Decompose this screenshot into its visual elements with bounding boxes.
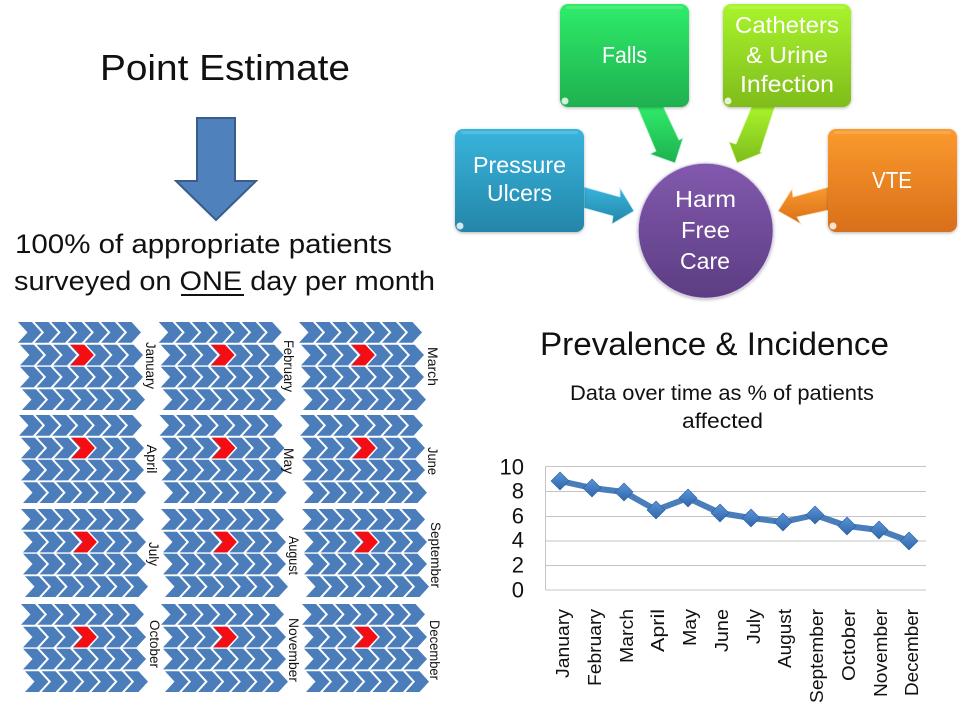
month block: November (161, 604, 301, 692)
x axis labels: March (617, 609, 637, 663)
month block: March: March (425, 347, 440, 386)
data markers (551, 472, 918, 550)
month block: January (18, 322, 158, 410)
y axis labels: 6 (512, 504, 524, 528)
y axis labels: 4 (512, 528, 524, 552)
month block: June (300, 415, 440, 503)
box: Pressure Ulcers: Ulcers (487, 180, 552, 206)
month block: January: January (143, 342, 158, 389)
line chart: percent of patients affected by month (500, 454, 926, 703)
text block: survey description: surveyed on ONE day per month (14, 266, 435, 296)
x axis labels: June (712, 609, 732, 652)
arrow: VTE to centre (778, 187, 829, 224)
box: Falls (560, 4, 689, 107)
x axis labels (553, 609, 922, 703)
arrow: down from title (176, 118, 256, 220)
month block: May (160, 415, 296, 503)
arrow: Pressure Ulcers to centre (584, 187, 634, 224)
month block: April (19, 415, 159, 503)
x axis labels: February (585, 609, 605, 686)
y axis labels: 10 (500, 454, 524, 480)
x axis labels: December (902, 609, 922, 696)
x axis labels: April (648, 609, 668, 652)
x axis labels: November (871, 609, 891, 697)
y axis labels: 0 (512, 578, 524, 602)
month block: May: May (281, 448, 296, 474)
x axis labels: October (839, 609, 859, 681)
circle: Harm Free Care: Care (680, 248, 730, 274)
x axis labels: August (775, 609, 795, 668)
box: VTE: VTE (872, 167, 912, 193)
month block: September (302, 509, 443, 597)
month block: February (159, 322, 296, 410)
x axis labels: May (680, 609, 700, 646)
chart title: Data over time as % of patients (570, 382, 874, 405)
text block: survey description (14, 229, 435, 296)
y axis labels: 2 (512, 552, 524, 578)
box: VTE (828, 129, 957, 232)
heading: Prevalence and Incidence: Prevalence & Incidence (540, 326, 889, 362)
x axis labels: July (744, 609, 764, 644)
month block: July (21, 509, 161, 597)
box: Catheters and Urine Infection: Catheters (735, 12, 839, 38)
circle: Harm Free Care (638, 163, 773, 298)
box: Catheters and Urine Infection: & Urine (746, 42, 828, 68)
box: Catheters and Urine Infection (723, 4, 851, 107)
x axis labels: September (807, 609, 827, 703)
month block: August (161, 509, 301, 597)
text block: survey description: 100% of appropriate patients (15, 229, 392, 259)
box: Falls: Falls (602, 42, 647, 68)
month block: December: December (427, 620, 442, 680)
month block: October (21, 604, 162, 692)
chart title (570, 382, 874, 433)
month block: September: September (428, 522, 443, 588)
month block: August: August (286, 536, 301, 575)
panel: Harm Free Care diagram (455, 4, 957, 298)
arrow: Catheters to centre (729, 106, 775, 163)
month block: March (299, 322, 440, 410)
box: Pressure Ulcers (455, 129, 584, 232)
title: Point Estimate: Point Estimate (100, 47, 350, 88)
y axis labels: 8 (512, 478, 524, 504)
month block: October: October (147, 620, 162, 668)
month block: June: June (425, 447, 440, 475)
month block: December (302, 604, 442, 692)
circle: Harm Free Care: Free (681, 217, 730, 243)
box: Catheters and Urine Infection: Infection (740, 71, 834, 97)
panel: monthly chevron calendar (18, 322, 443, 692)
arrow: Falls to centre (637, 106, 683, 163)
data line (560, 481, 909, 541)
month block: November: November (286, 618, 301, 683)
y axis labels (500, 454, 524, 602)
month block: July: July (146, 542, 161, 566)
x axis labels: January (553, 609, 573, 678)
month block: February: February (281, 340, 296, 392)
chart title: affected (682, 410, 763, 433)
box: Pressure Ulcers: Pressure (473, 152, 566, 178)
circle: Harm Free Care: Harm (675, 186, 736, 212)
month block: April: April (144, 444, 159, 474)
